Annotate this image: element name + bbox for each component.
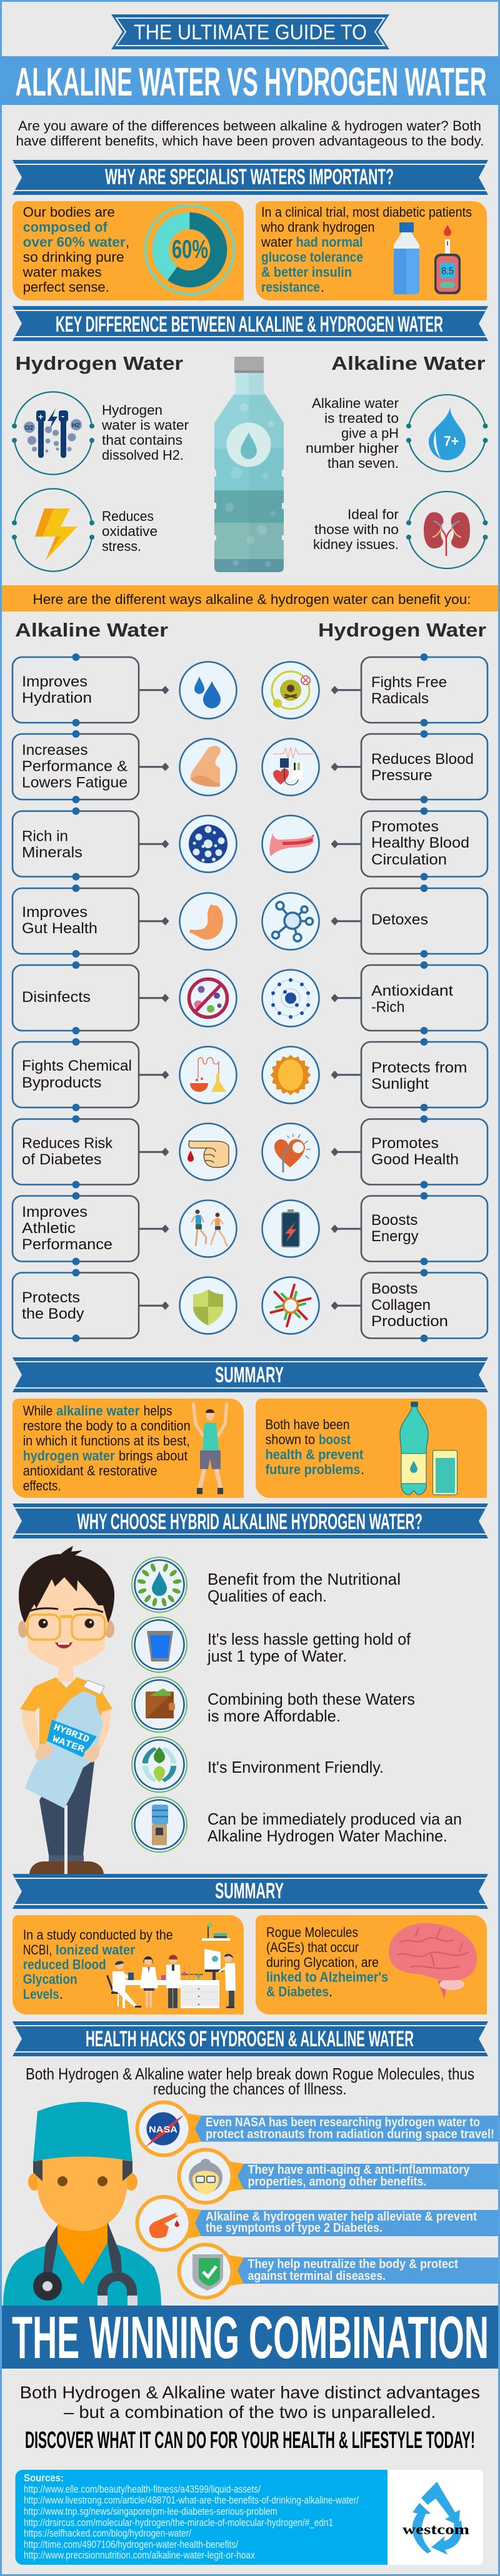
banner: the ultimate guide to: THE ULTIMATE GUIDE TO	[134, 21, 367, 44]
text: body composition: water makes	[22, 264, 102, 280]
benefit: improves athletic performance: Athletic	[22, 1220, 76, 1237]
text: less hassle: It's less hassle getting hold of	[208, 1630, 411, 1648]
benefit: healthy blood circulation	[262, 807, 488, 881]
benefit: improves athletic performance: Performance	[22, 1236, 112, 1253]
benefit: rich in minerals: Rich in	[22, 828, 68, 845]
text: terminal diseases: They help neutralize the body & protect	[248, 2257, 458, 2271]
text: summary: hydrogen water	[23, 1448, 115, 1464]
benefit: boosts collagen production: Production	[371, 1313, 448, 1330]
text: type 2 diabetes: Alkaline & hydrogen water help alleviate & prevent	[206, 2210, 477, 2224]
benefit: increases performance: Performance &	[22, 758, 128, 775]
heading ribbon: health hacks	[12, 2021, 488, 2056]
icon: electrolysis: -	[61, 411, 64, 422]
icon: electrolysis	[12, 392, 94, 475]
benefit: antioxidant-rich: Antioxidant	[371, 983, 453, 999]
benefit: antioxidant-rich: -Rich	[371, 999, 405, 1016]
panel: sources	[15, 2470, 388, 2565]
benefit: protects from sunlight: Sunlight	[371, 1076, 429, 1092]
benefit: disinfects: Disinfects	[22, 989, 91, 1006]
text: summary: brings about	[119, 1448, 188, 1464]
text: machine	[208, 1810, 462, 1845]
benefit: improves hydration: Improves	[22, 673, 88, 690]
benefit: boosts energy: Boosts	[371, 1212, 418, 1229]
benefit: improves gut health: Gut Health	[22, 920, 98, 937]
illustration: man with raised arms	[193, 1402, 227, 1494]
text: clinical trial result: resistance	[261, 279, 320, 295]
text: NCBI study: reduced Blood	[23, 1956, 106, 1973]
text: NCBI study: In a study conducted by the	[23, 1927, 173, 1943]
text: clinical trial result: who drank hydrogen	[261, 219, 375, 235]
illustration: boy holding hybrid water bottle: HYBRID	[52, 1722, 91, 1745]
text: reduces oxidative stress	[102, 508, 158, 554]
text: summary: While	[23, 1403, 52, 1419]
text: type 2 diabetes: the symptoms of type 2 Diabetes.	[206, 2221, 382, 2235]
item: ideal for kidneys	[313, 492, 488, 568]
illustration: central water bottle	[212, 357, 288, 573]
benefit: improves athletic performance	[12, 1192, 236, 1266]
text: boost health: future problems	[265, 1462, 360, 1477]
text: alkaline definition: is treated to	[324, 410, 399, 426]
text: clinical trial result: had normal	[296, 234, 362, 250]
heading: hydrogen water column: Hydrogen Water	[318, 619, 486, 641]
chart: 60% donut: 60%	[172, 234, 208, 264]
heading ribbon: why are specialist waters important	[12, 160, 488, 195]
benefit: fights free radicals: Fights Free	[371, 674, 447, 691]
text: summary: effects.	[23, 1478, 61, 1494]
text: conclusion	[20, 2382, 480, 2422]
panel: sources: http://www.livestrong.com/article/498701-what-are-the-benefits-of-drinking-alkaline-water/	[24, 2495, 359, 2506]
benefit: disinfects	[12, 961, 236, 1034]
benefit: promotes good health: Good Health	[371, 1151, 459, 1168]
text: NCBI study: Ionized water	[56, 1942, 135, 1958]
illustration: lab scientists	[106, 1923, 236, 2008]
text: rogue molecules: .	[329, 1984, 332, 1999]
icon: drop 7+	[406, 395, 488, 472]
text: rogue molecules: during Glycation, are	[266, 1954, 379, 1970]
text: boost health: boost	[319, 1432, 351, 1447]
panel: NCBI study	[12, 1915, 244, 2014]
item: less hassle	[132, 1617, 411, 1672]
panel: sources: http://www.tnp.sg/news/singapore/pm-lee-diabetes-serious-problem	[24, 2506, 278, 2517]
icon: battery	[262, 1201, 319, 1257]
benefit: protects the body	[12, 1269, 236, 1342]
icon: NASA logo	[145, 2113, 184, 2147]
icon: electrolysis: +	[38, 412, 43, 422]
text: ideal for kidneys: Ideal for	[348, 507, 399, 522]
panel: sources: http://www.precisionnutrition.com/alkaline-water-legit-or-hoax	[24, 2550, 256, 2561]
text: rogue molecules: linked to Alzheimer's	[266, 1969, 388, 1985]
panel: sources: https://selfhacked.com/blog/hydrogen-water/	[24, 2528, 191, 2539]
text: affordable: is more Affordable.	[208, 1707, 341, 1725]
text: hydrogen definition: that contains	[102, 432, 182, 448]
benefit: boosts energy: Energy	[371, 1228, 419, 1245]
text: alkaline definition: Alkaline water	[312, 395, 399, 411]
text: rogue molecules intro: reducing the chances of Illness.	[153, 2079, 346, 2098]
text: body composition: so drinking pure	[23, 249, 124, 265]
illustration: boy holding hybrid water bottle	[18, 1546, 114, 1874]
item: machine	[132, 1797, 462, 1852]
icon: shield	[180, 1277, 236, 1334]
text: body composition: Our bodies are	[23, 204, 115, 220]
benefit: protects from sunlight	[262, 1038, 488, 1111]
icon: glucose meter	[434, 225, 461, 294]
benefit: reduces risk of diabetes: of Diabetes	[22, 1151, 101, 1168]
benefit: fights chemical byproducts: Byproducts	[22, 1074, 101, 1091]
text: ideal for kidneys	[313, 507, 399, 552]
logo: westcom	[388, 2470, 483, 2565]
text: clinical trial result: water	[261, 234, 292, 250]
text: summary	[23, 1403, 191, 1494]
text: rogue molecules: & Diabetes	[266, 1984, 329, 1999]
callout: terminal diseases	[179, 2245, 498, 2297]
benefit: improves athletic performance: Improves	[22, 1204, 88, 1221]
icon: hand and blood	[149, 2212, 179, 2238]
text: environment friendly: It's Environment Friendly.	[208, 1758, 384, 1776]
illustration: bottle and glass	[400, 1402, 458, 1495]
text: NCBI study: Levels	[23, 1986, 59, 2002]
text: nutritional qualities	[208, 1570, 401, 1605]
icon: water drops	[180, 662, 236, 718]
icon: electrolysis: O2	[25, 425, 34, 432]
text: clinical trial result: In a clinical trial, most diabetic patients	[261, 204, 472, 220]
text: hydrogen definition	[101, 402, 189, 463]
icon: electrolysis: H2	[72, 422, 80, 429]
text: NASA	[206, 2116, 494, 2141]
text: alkaline definition: give a pH	[341, 425, 399, 441]
text: hydrogen definition: dissolved H2.	[102, 447, 184, 463]
text: boost health: shown to	[265, 1432, 315, 1447]
benefit: reduces blood pressure: Pressure	[371, 767, 432, 784]
text: summary: in which it functions at its best,	[23, 1433, 190, 1449]
text: affordable: Combining both these Waters	[208, 1690, 415, 1708]
text: hydrogen definition: water is water	[101, 417, 189, 433]
benefit: boosts collagen production: Collagen	[371, 1297, 431, 1314]
heading: hydrogen water: Hydrogen Water	[15, 352, 183, 374]
text: body composition: ,	[126, 234, 129, 250]
panel: boost health summary	[256, 1399, 487, 1498]
heading ribbon: key difference	[12, 306, 488, 341]
icon: check shield	[192, 2254, 223, 2291]
icon: runners	[180, 1201, 236, 1257]
benefit: boosts collagen production	[262, 1269, 488, 1342]
text: body composition: composed of	[23, 219, 108, 235]
text: NCBI study	[23, 1927, 173, 2002]
text: terminal diseases	[248, 2257, 458, 2283]
text: machine: Alkaline Hydrogen Water Machine.	[208, 1826, 448, 1845]
logo: westcom: westcom	[402, 2522, 469, 2537]
text: summary: alkaline water	[56, 1403, 140, 1419]
item: nutritional qualities	[132, 1557, 401, 1612]
heading: alkaline water column: Alkaline Water	[15, 619, 168, 641]
text: rogue molecules	[266, 1925, 388, 1999]
text: NCBI study: Glycation	[23, 1971, 78, 1987]
icon: heart stethoscope	[262, 1123, 319, 1181]
benefit: boosts energy	[262, 1192, 488, 1266]
benefit: healthy blood circulation: Circulation	[371, 851, 447, 868]
text: clinical trial result: .	[321, 279, 324, 295]
heading ribbon: summary two	[12, 1874, 488, 1909]
icon: no bacteria	[180, 969, 236, 1027]
icon: water cooler	[132, 1797, 187, 1852]
orange strip: benefits intro: Here are the different ways alkaline & hydrogen water can benefit you:	[32, 592, 471, 607]
icon: sun	[262, 1047, 319, 1103]
text: alkaline definition: than seven.	[328, 455, 399, 471]
benefit: protects from sunlight: Protects from	[371, 1059, 468, 1076]
benefit: detoxes	[262, 884, 488, 958]
icon: grandmother	[189, 2159, 222, 2194]
icon: stomach	[180, 893, 236, 949]
text: nutritional qualities: Qualities of each.	[208, 1587, 327, 1605]
item: environment friendly	[132, 1737, 384, 1792]
text: hydrogen definition: Hydrogen	[102, 402, 162, 418]
text: machine: Can be immediately produced via an	[208, 1810, 462, 1828]
icon: eco leaves	[132, 1737, 187, 1792]
icon: chemistry	[180, 1047, 236, 1103]
text: conclusion: – but a combination of the two is unparalleled.	[64, 2402, 436, 2422]
benefit: increases performance: Lowers Fatigue	[22, 775, 128, 791]
icon: glass of water	[132, 1617, 187, 1672]
text: reduces oxidative stress: Reduces	[102, 508, 154, 524]
text: terminal diseases: against terminal diseases.	[248, 2269, 386, 2283]
icon: lightning bolt	[12, 488, 94, 572]
panel: alkaline and hydrogen summary	[12, 1399, 244, 1498]
heading ribbon: summary: SUMMARY	[215, 1363, 284, 1387]
text: clinical trial result	[261, 204, 472, 295]
text: less hassle: just 1 type of Water.	[207, 1647, 347, 1665]
text: summary: restore the body to a condition	[23, 1418, 191, 1434]
benefit: increases performance	[12, 730, 236, 803]
icon: blood pressure monitor	[262, 738, 319, 796]
icon: atom	[262, 969, 319, 1027]
benefit: antioxidant-rich	[262, 961, 488, 1034]
text: NCBI study: .	[59, 1986, 63, 2002]
callout: type 2 diabetes	[138, 2197, 498, 2250]
illustration: boy holding hybrid water bottle: WATER	[51, 1734, 86, 1755]
callout: anti-aging	[179, 2150, 498, 2202]
benefit: increases performance: Increases	[22, 742, 88, 759]
text: affordable	[208, 1690, 415, 1725]
orange strip: benefits intro	[2, 585, 498, 612]
icon: collagen wheel	[262, 1277, 319, 1334]
illustration: brain	[389, 1923, 477, 1999]
benefit: reduces blood pressure: Reduces Blood	[371, 751, 474, 768]
text: summary: helps	[144, 1403, 172, 1419]
text: ideal for kidneys: those with no	[314, 522, 399, 537]
callout: NASA	[138, 2103, 498, 2155]
benefit: healthy blood circulation: Healthy Blood	[371, 835, 469, 851]
benefit: fights free radicals	[262, 653, 488, 726]
benefit: improves hydration	[12, 653, 236, 726]
benefit: fights free radicals: Radicals	[371, 690, 429, 707]
text: type 2 diabetes	[206, 2210, 477, 2235]
text: reduces oxidative stress: oxidative	[102, 523, 158, 539]
text: anti-aging: properties, among other benefits.	[248, 2175, 426, 2189]
text: boost health: health & prevent	[265, 1447, 364, 1462]
panel: sources: http://drsircus.com/molecular-hydrogen/the-miracle-of-molecular-hydrogen/#_edn1	[24, 2517, 333, 2529]
benefit: fights chemical byproducts	[12, 1038, 236, 1111]
icon: wallet	[132, 1677, 187, 1732]
panel: sources: http://time.com/4907106/hydrogen-water-health-benefits/	[24, 2539, 238, 2550]
benefit: rich in minerals: Minerals	[22, 845, 82, 861]
icon: drop 7+: 7+	[444, 433, 459, 449]
text: alkaline definition	[306, 395, 399, 471]
heading ribbon: why choose hybrid	[12, 1503, 488, 1538]
text: rogue molecules: Rogue Molecules	[266, 1925, 358, 1940]
text: anti-aging: They have anti-aging & anti-inflammatory	[248, 2163, 470, 2177]
icon: muscle arm	[180, 738, 236, 796]
heading: alkaline water: Alkaline Water	[331, 352, 485, 374]
benefit: improves gut health: Improves	[22, 904, 88, 921]
benefit: improves gut health	[12, 884, 236, 958]
icon: water bottle	[394, 222, 419, 294]
item: reduces oxidative stress	[12, 488, 158, 572]
heading ribbon: summary	[12, 1357, 488, 1392]
icon: glucose meter: 8.5	[441, 266, 454, 277]
intro text	[16, 118, 484, 149]
benefit: promotes good health: Promotes	[371, 1135, 439, 1152]
text: body composition	[22, 204, 129, 295]
icon: free radical	[262, 662, 319, 718]
icon: molecule	[262, 893, 319, 949]
benefit: improves hydration: Hydration	[22, 690, 92, 706]
text: clinical trial result: & better insulin	[261, 264, 352, 280]
icon: artery	[262, 816, 319, 872]
benefit: boosts collagen production: Boosts	[371, 1281, 418, 1297]
benefit: reduces risk of diabetes: Reduces Risk	[22, 1135, 113, 1152]
item: alkaline water definition	[306, 395, 488, 472]
text: reduces oxidative stress: stress.	[102, 538, 141, 554]
benefit: healthy blood circulation: Promotes	[371, 818, 439, 835]
text: body composition: perfect sense.	[23, 279, 109, 295]
text: anti-aging	[248, 2163, 470, 2189]
item: hydrogen water definition	[12, 392, 189, 475]
panel: sources: Sources:	[24, 2472, 64, 2484]
icon: drop with leaves	[132, 1557, 187, 1612]
heading ribbon: summary two: SUMMARY	[215, 1879, 284, 1903]
icon: finger prick	[180, 1123, 236, 1181]
text: boost health	[265, 1417, 364, 1477]
icon: minerals	[180, 816, 236, 872]
benefit: rich in minerals	[12, 807, 236, 881]
panel: body water 60%	[12, 201, 244, 300]
text: rogue molecules: (AGEs) that occur	[266, 1939, 359, 1955]
panel: sources: http://www.elle.com/beauty/health-fitness/a43599/liquid-assets/	[24, 2484, 261, 2495]
chart: 60% donut	[145, 206, 234, 294]
text: NCBI study: NCBI,	[23, 1942, 52, 1958]
text: boost health: Both have been	[265, 1417, 350, 1432]
banner: the ultimate guide to	[111, 14, 389, 49]
illustration: doctor	[3, 2102, 161, 2306]
benefit: protects the body: the Body	[22, 1305, 84, 1322]
item: affordable	[132, 1677, 415, 1732]
benefit: protects the body: Protects	[22, 1289, 80, 1306]
text: body composition: over 60% water	[23, 234, 126, 250]
text: conclusion: Both Hydrogen & Alkaline water have distinct advantages	[20, 2382, 480, 2402]
panel: clinical trial	[256, 201, 487, 300]
text: boost health: .	[361, 1462, 364, 1477]
benefit: detoxes: Detoxes	[371, 911, 428, 928]
benefit: fights chemical byproducts: Fights Chemical	[22, 1058, 132, 1074]
intro text: Are you aware of the differences between alkaline & hydrogen water? Both	[18, 118, 481, 134]
text: alkaline definition: number higher	[306, 440, 399, 456]
benefit: promotes good health	[262, 1116, 488, 1188]
text: ideal for kidneys: kidney issues.	[313, 537, 399, 552]
text: less hassle	[207, 1630, 411, 1665]
benefit: reduces blood pressure	[262, 730, 488, 803]
text: nutritional qualities: Benefit from the Nutritional	[208, 1570, 401, 1588]
text: clinical trial result: glucose tolerance	[261, 249, 363, 265]
intro text: have different benefits, which have been proven advantageous to the body.	[16, 133, 484, 149]
panel: rogue molecules	[256, 1915, 487, 2014]
icon: NASA logo: NASA	[149, 2124, 178, 2135]
benefit: reduces risk of diabetes	[12, 1116, 236, 1188]
text: rogue molecules intro	[26, 2064, 474, 2098]
text: summary: antioxidant & restorative	[23, 1463, 158, 1479]
icon: kidneys	[406, 492, 488, 568]
